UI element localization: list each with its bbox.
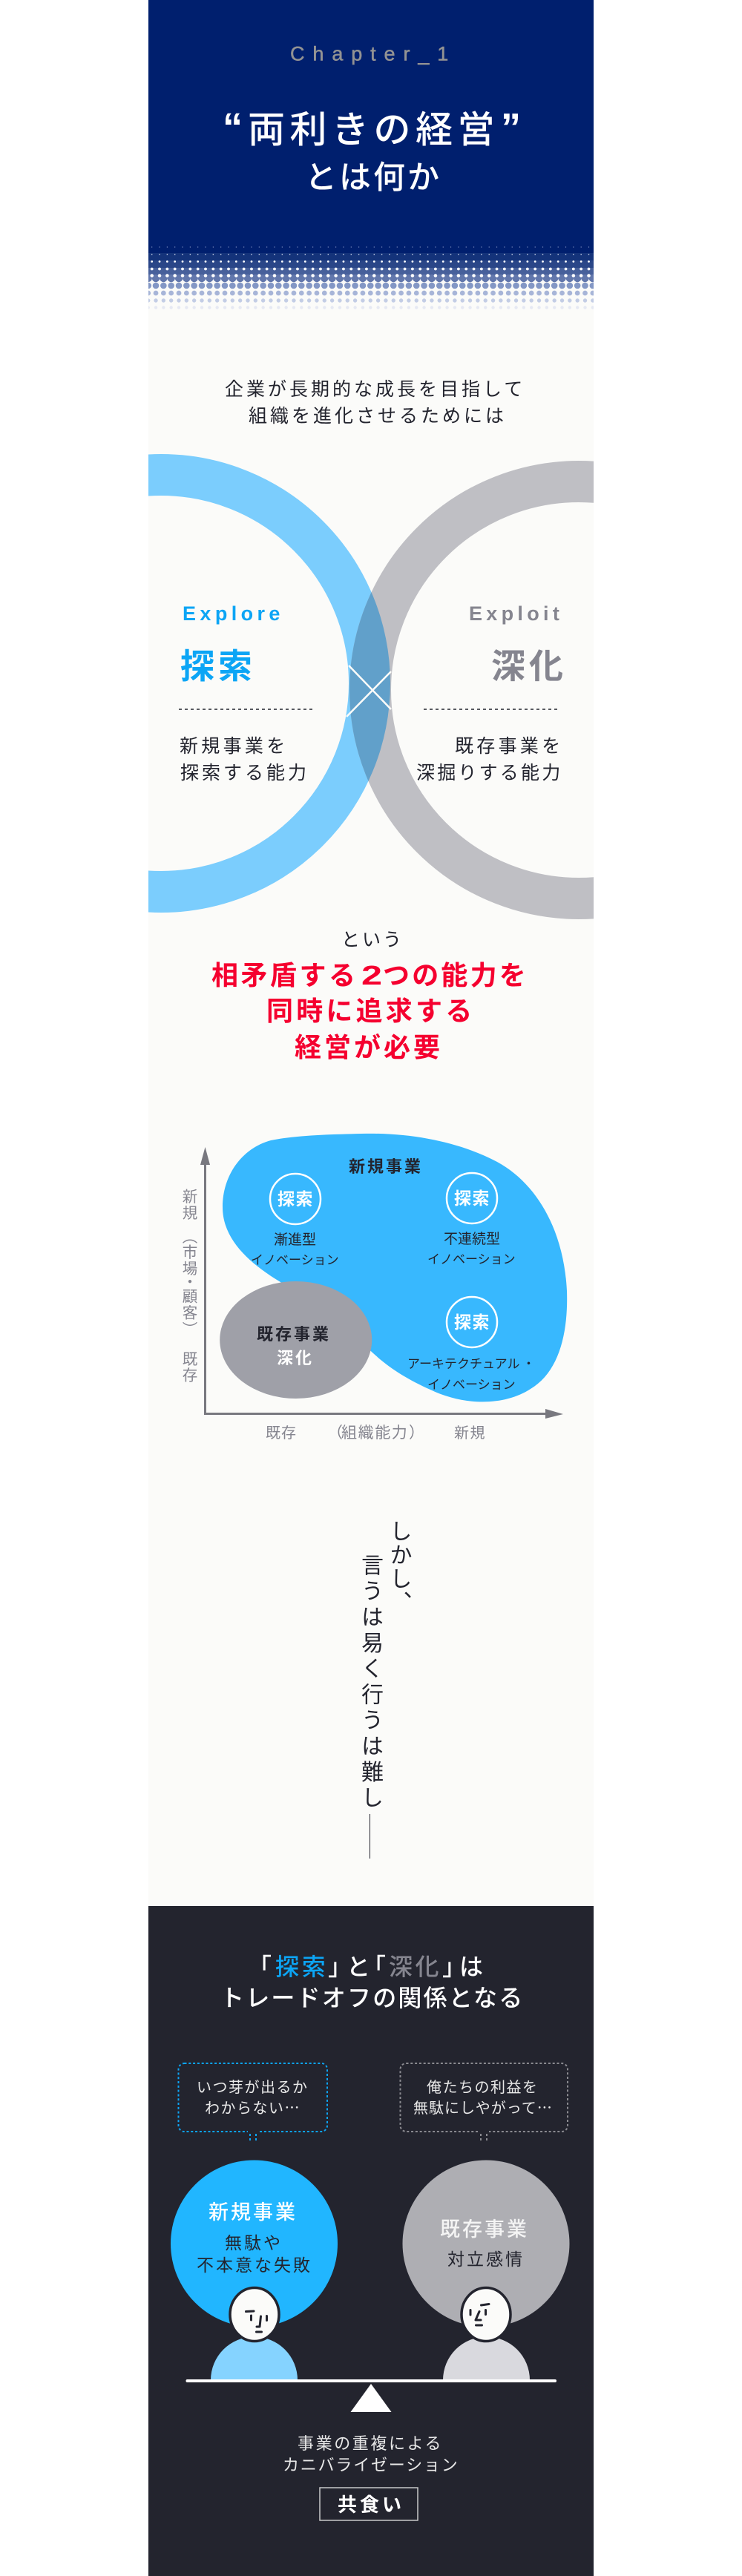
blob: new business [223, 1134, 567, 1402]
explore column: 新規事業を [180, 736, 289, 757]
circle: new business: 新規事業 [209, 2201, 298, 2224]
x axis label: 既存 [266, 1425, 297, 1442]
trade-off heading [220, 1954, 524, 2011]
badge: incremental [251, 1174, 339, 1267]
x axis label: （ [327, 1425, 343, 1442]
circle: new business [171, 2161, 338, 2327]
trade-off heading: は [459, 1954, 483, 1980]
badge: discontinuous: 探索 [454, 1189, 490, 1208]
x axis label: 新規 [454, 1425, 486, 1442]
title: 両利きの経営 [248, 109, 499, 151]
ring: exploit [349, 461, 594, 919]
x axis label: 組織能力 [341, 1425, 408, 1442]
red statement: 相矛盾する [211, 960, 358, 990]
y axis label: 市場 [180, 1244, 197, 1277]
ellipse: existing business [220, 1281, 372, 1399]
red statement: 経営が必要 [295, 1032, 443, 1062]
red statement: 2 [361, 960, 382, 990]
badge: architectural: アーキテクチュアル [407, 1357, 519, 1371]
seesaw [186, 2379, 556, 2412]
vertical text: 言うは易く行うは難し [358, 1554, 384, 1812]
intro text [225, 379, 525, 427]
exploit column: 深化 [491, 647, 567, 686]
trade-off heading: 「 [362, 1954, 386, 1980]
y axis label [180, 1189, 197, 1383]
header banner [148, 0, 597, 307]
badge: architectural [407, 1297, 535, 1392]
dark panel [148, 1906, 594, 2576]
y axis label: （ [180, 1229, 197, 1243]
x axis label: ） [409, 1425, 424, 1442]
circle: new business: 不本意な失敗 [197, 2255, 312, 2275]
badge: incremental: 漸進型 [274, 1232, 316, 1248]
title [223, 105, 521, 196]
venn diagram [148, 454, 594, 919]
exploit column [416, 602, 567, 783]
title: とは何か [305, 160, 441, 196]
badge: architectural: ・ [522, 1357, 535, 1371]
chart [180, 1134, 567, 1442]
speech bubble: left: わからない… [205, 2096, 301, 2117]
person: left [211, 2288, 298, 2380]
ring: explore [148, 454, 371, 913]
speech bubble: left: いつ芽が出るか [197, 2079, 309, 2096]
circle: new business: 無駄や [225, 2233, 283, 2253]
y axis label: ） [180, 1321, 197, 1337]
circle: existing business: 既存事業 [440, 2218, 529, 2241]
explore column: 探索 [180, 647, 256, 686]
label: existing: 既存事業 [257, 1325, 331, 1344]
x axis label [266, 1425, 486, 1442]
axes [200, 1147, 563, 1419]
trade-off heading: 」 [442, 1954, 466, 1980]
exploit column: 既存事業を [455, 736, 564, 757]
badge: incremental: 探索 [278, 1189, 314, 1209]
badge: discontinuous [427, 1173, 516, 1266]
explore column [179, 602, 315, 783]
y axis label: 既存 [180, 1351, 197, 1383]
speech bubble: right: 無駄にしやがって… [413, 2096, 553, 2117]
circle: existing business: 対立感情 [447, 2250, 525, 2269]
y axis label: 新規 [180, 1189, 197, 1221]
page background [148, 0, 594, 2576]
badge: architectural: 探索 [454, 1312, 490, 1332]
cannibalization text [283, 2434, 459, 2474]
label: existing: 深化 [277, 1349, 314, 1367]
label: new business: 新規事業 [349, 1157, 423, 1176]
chapter label: Chapter_1 [290, 43, 456, 65]
explore column: 探索する能力 [180, 763, 309, 783]
vertical text [358, 1519, 411, 1859]
explore column: Explore [183, 602, 284, 625]
cannibalization text: 事業の重複による [298, 2434, 443, 2453]
exploit column: 深掘りする能力 [416, 763, 562, 783]
badge: discontinuous: 不連続型 [444, 1231, 500, 1247]
intro text: 企業が長期的な成長を目指して [225, 379, 525, 400]
trade-off heading: 「 [248, 1954, 272, 1980]
red statement: 同時に追求する [266, 996, 475, 1026]
speech bubble: left [178, 2063, 327, 2142]
red statement: つの能力を [383, 960, 528, 990]
speech bubble: right: 俺たちの利益を [427, 2079, 539, 2096]
badge: discontinuous: イノベーション [427, 1252, 516, 1266]
intro text: 組織を進化させるためには [249, 406, 507, 427]
y axis label: ・ [180, 1274, 197, 1289]
trade-off heading: トレードオフの関係となる [220, 1985, 524, 2011]
label box [320, 2488, 418, 2520]
trade-off heading: 探索 [275, 1954, 328, 1980]
cross mark [347, 666, 391, 717]
trade-off heading: 深化 [389, 1954, 441, 1980]
badge: incremental: イノベーション [251, 1253, 339, 1267]
badge: architectural: イノベーション [427, 1378, 516, 1392]
exploit column: Exploit [469, 602, 563, 625]
cannibalization text: カニバライゼーション [283, 2456, 459, 2474]
label box: 共食い [338, 2494, 404, 2516]
label: existing [257, 1325, 331, 1367]
person: right [443, 2288, 530, 2380]
trade-off heading: と [347, 1954, 370, 1980]
trade-off heading: 」 [328, 1954, 352, 1980]
ring overlap [349, 592, 390, 781]
vertical text: しかし、 [386, 1519, 411, 1614]
circle: existing business [402, 2161, 570, 2327]
y axis label: 顧客 [180, 1288, 197, 1321]
speech bubble: right [401, 2063, 568, 2142]
red statement [211, 960, 528, 1062]
connector text: という [341, 930, 404, 950]
title: ” [501, 105, 521, 150]
title: “ [223, 105, 243, 150]
